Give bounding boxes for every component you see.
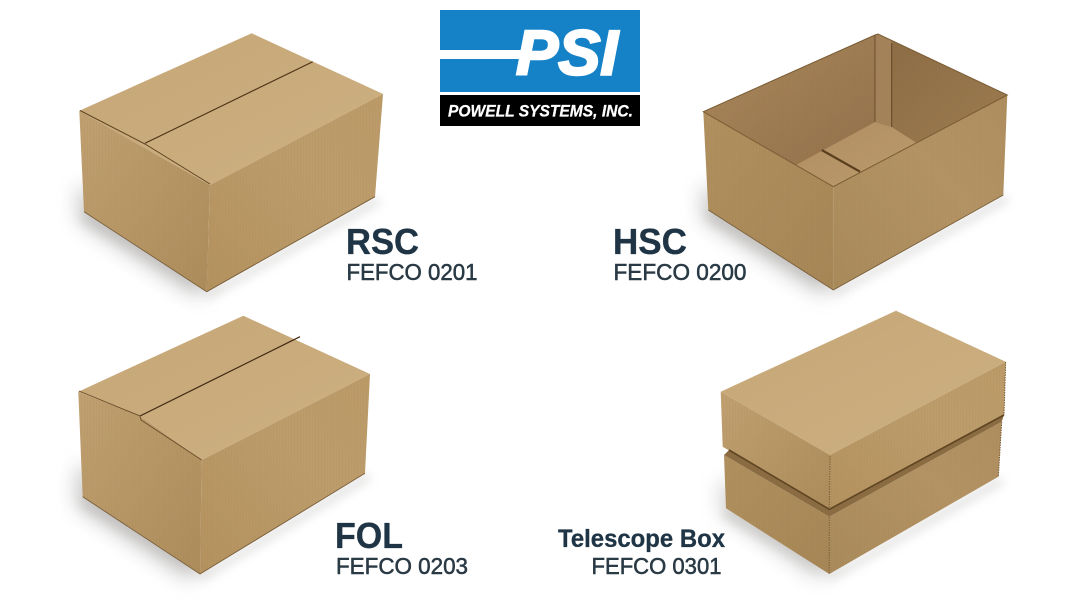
label: Telescope Box: FEFCO 0301 xyxy=(592,553,722,579)
label: RSC xyxy=(346,221,478,285)
box: RSC FEFCO 0201 xyxy=(79,33,383,298)
logo: PSI Powell Systems, Inc. xyxy=(440,10,640,126)
label: RSC: RSC xyxy=(346,221,419,262)
box interior base xyxy=(703,34,1007,187)
bottom edge xyxy=(83,473,365,574)
top face xyxy=(79,33,383,185)
lid left xyxy=(721,392,830,509)
front right face xyxy=(833,95,1007,290)
right face xyxy=(207,94,383,292)
left face xyxy=(79,111,210,292)
gap between lid and tray xyxy=(724,415,1004,517)
lower tray left xyxy=(724,455,829,574)
box: FOL FEFCO 0203 xyxy=(78,316,372,580)
lower tray right xyxy=(829,422,1002,574)
box: Telescope FEFCO 0301 xyxy=(721,311,1006,580)
logo PSI letters: PSI xyxy=(516,18,620,88)
label: FOL: FOL xyxy=(335,515,403,556)
logo white stripe xyxy=(440,50,524,59)
right face xyxy=(200,374,370,574)
flap seams xyxy=(145,62,313,143)
lid top xyxy=(721,311,1006,455)
lid shadow line xyxy=(729,415,1004,509)
label: HSC: HSC xyxy=(613,221,687,262)
flap seams xyxy=(140,337,300,416)
front left face xyxy=(703,112,833,290)
left face xyxy=(78,392,202,574)
label: FOL: FEFCO 0203 xyxy=(336,553,468,579)
label: Telescope Box xyxy=(558,525,725,579)
inside left wall xyxy=(703,35,875,165)
top face xyxy=(78,316,370,460)
label: HSC xyxy=(613,221,746,285)
logo company name: POWELL SYSTEMS, INC. xyxy=(448,102,633,120)
label: RSC: FEFCO 0201 xyxy=(346,259,478,285)
lid right xyxy=(829,362,1006,509)
inside back fold xyxy=(875,34,892,127)
floor flaps xyxy=(796,122,917,187)
logo blue panel xyxy=(440,10,640,92)
box: HSC FEFCO 0200 xyxy=(703,34,1010,296)
rim xyxy=(703,34,1007,187)
logo black band xyxy=(440,95,640,126)
corrugated corners xyxy=(829,362,1006,574)
label: HSC: FEFCO 0200 xyxy=(614,259,746,285)
label: FOL xyxy=(335,515,468,579)
inside right wall xyxy=(892,41,1007,143)
label: Telescope Box: Telescope Box xyxy=(558,525,725,553)
bottom edge xyxy=(84,197,375,292)
